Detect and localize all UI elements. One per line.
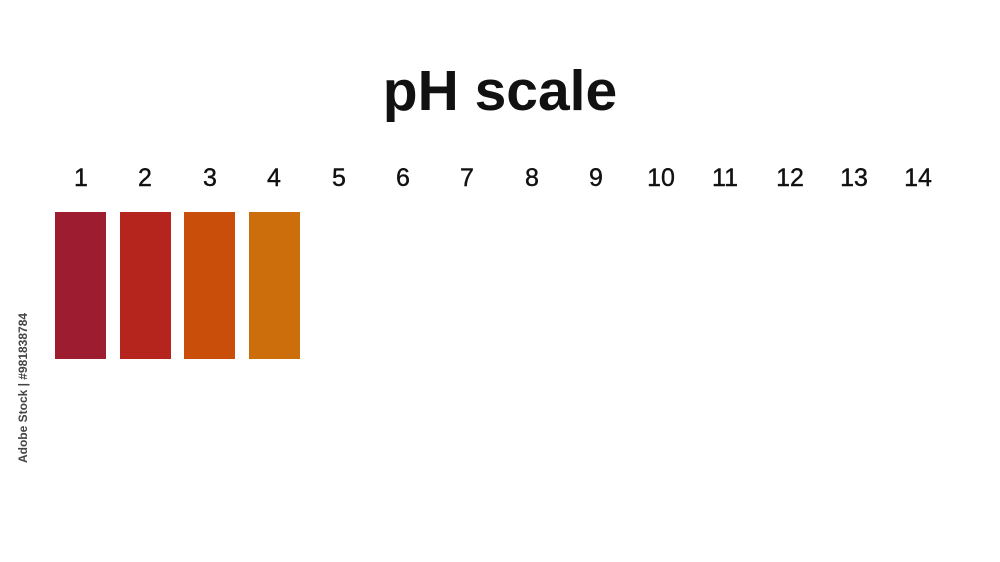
scale numbers: 1 (74, 164, 88, 192)
scale numbers: 10 (647, 164, 675, 192)
scale numbers: 6 (396, 164, 410, 192)
scale numbers: 2 (138, 164, 152, 192)
scale numbers: 13 (840, 164, 868, 192)
scale numbers: 11 (712, 164, 738, 192)
scale numbers: 8 (525, 164, 539, 192)
scale numbers: 5 (332, 164, 346, 192)
scale numbers: 7 (460, 164, 474, 192)
scale numbers: 9 (589, 164, 603, 192)
title: pH scale (383, 59, 617, 123)
scale numbers: 4 (267, 164, 281, 192)
color bars (55, 212, 300, 359)
scale numbers (74, 164, 932, 192)
scale numbers: 12 (776, 164, 804, 192)
scale numbers: 14 (904, 164, 932, 192)
watermark id text: Adobe Stock | #981838784 (16, 313, 30, 463)
scale numbers: 3 (203, 164, 217, 192)
